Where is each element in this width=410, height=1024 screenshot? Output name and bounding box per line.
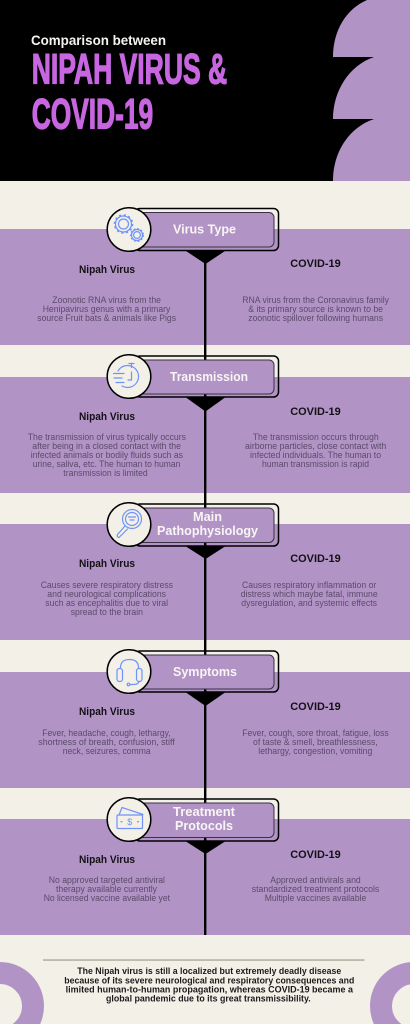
panel: symptoms: [38, 701, 389, 756]
conclusion text: limited human-to-human propagation, whereas COVID-19 became a: [66, 984, 353, 994]
text: Nipah pathophysiology: Causes severe respiratory distress: [41, 580, 174, 590]
text: COVID-19 symptoms: Fever, cough, sore throat, fatigue, loss: [242, 728, 389, 738]
decorative ring: bottom right: [381, 973, 410, 1024]
heading: COVID-19: COVID-19: [290, 849, 341, 861]
section header: Main Pathophysiology: Pathophysiology: [157, 524, 258, 538]
text: COVID-19 virus type: & its primary source is known to be: [248, 304, 383, 314]
header banner: [0, 0, 410, 181]
text: COVID-19 transmission: infected individuals. The human to: [250, 450, 381, 460]
section header: Transmission: Transmission: [170, 370, 248, 384]
text: Nipah virus type: [37, 295, 177, 323]
text: COVID-19 virus type: RNA virus from the Coronavirus family: [242, 295, 390, 305]
section header: Transmission: [107, 355, 278, 412]
section header: Virus Type: Virus Type: [173, 222, 236, 236]
heading: Nipah Virus: Nipah Virus: [79, 558, 135, 570]
text: COVID-19 treatment: Approved antivirals and: [270, 875, 361, 885]
decorative ring: bottom left: [0, 973, 33, 1024]
icon: stopwatch: [114, 364, 139, 387]
text: Nipah pathophysiology: [41, 580, 174, 617]
section header: Virus Type: [107, 208, 278, 264]
text: Nipah virus type: Zoonotic RNA virus from the: [52, 295, 161, 305]
icon: banknotes: $: [127, 817, 132, 827]
heading: Nipah Virus: Nipah Virus: [79, 411, 135, 423]
text: Nipah virus type: source Fruit bats & animals like Pigs: [37, 313, 177, 323]
section header: Treatment Protocols: [107, 798, 278, 854]
text: COVID-19 treatment: Multiple vaccines available: [265, 893, 366, 903]
text: COVID-19 symptoms: of taste & smell, breathlessness,: [253, 737, 378, 747]
text: Nipah symptoms: Fever, headache, cough, lethargy,: [42, 728, 171, 738]
text: Nipah symptoms: [38, 728, 175, 756]
panel: virus type: [37, 258, 390, 323]
section header: Main Pathophysiology: Main: [193, 510, 222, 524]
heading: Nipah Virus: Nipah Virus: [79, 264, 135, 276]
text: COVID-19 virus type: [242, 295, 390, 323]
panel: transmission: [28, 406, 386, 478]
text: COVID-19 transmission: airborne particles, close contact with: [245, 441, 386, 451]
text: Nipah treatment: therapy available currently: [56, 884, 158, 894]
text: Nipah transmission: [28, 432, 187, 478]
text: Nipah pathophysiology: spread to the brain: [71, 607, 143, 617]
text: Nipah treatment: No approved targeted antiviral: [49, 875, 165, 885]
text: COVID-19 symptoms: [242, 728, 389, 756]
text: Nipah transmission: urine, saliva, etc. The human to human: [33, 459, 180, 469]
text: COVID-19 transmission: The transmission occurs through: [253, 432, 379, 442]
text: COVID-19 pathophysiology: Causes respiratory inflammation or: [242, 580, 376, 590]
panel: treatment protocols: [44, 849, 380, 903]
section header: Symptoms: Symptoms: [173, 665, 237, 679]
scalloped corner shape: [333, 0, 410, 181]
conclusion text: global pandemic due to its great transmissibility.: [106, 994, 311, 1004]
section header: Symptoms: [107, 650, 278, 706]
heading: COVID-19: COVID-19: [290, 406, 341, 418]
text: COVID-19 pathophysiology: distress which maybe fatal, immune: [241, 589, 378, 599]
text: Nipah transmission: infected animals or bodily fluids such as: [31, 450, 184, 460]
text: Nipah pathophysiology: such as encephalitis due to viral: [45, 598, 168, 608]
icon: magnifying glass: [117, 510, 142, 538]
text: Nipah treatment: No licensed vaccine available yet: [44, 893, 171, 903]
text: COVID-19 pathophysiology: dysregulation, and systemic effects: [241, 598, 378, 608]
central timeline: [204, 250, 206, 935]
purple section bands: [0, 229, 410, 935]
icon: headset: [117, 660, 142, 686]
heading: COVID-19: COVID-19: [290, 553, 341, 565]
icon: gears: [114, 215, 143, 241]
title: COVID-19: [32, 91, 153, 138]
title: [31, 32, 227, 138]
text: COVID-19 pathophysiology: [241, 580, 378, 608]
panel: main pathophysiology: [41, 553, 378, 617]
text: Nipah symptoms: shortness of breath, confusion, stiff: [38, 737, 175, 747]
text: Nipah virus type: Henipavirus genus with a primary: [43, 304, 171, 314]
heading: COVID-19: COVID-19: [290, 258, 341, 270]
heading: COVID-19: COVID-19: [290, 701, 341, 713]
text: COVID-19 treatment: [252, 875, 380, 903]
text: Nipah pathophysiology: and neurological complications: [47, 589, 167, 599]
text: COVID-19 transmission: human transmission is rapid: [262, 459, 369, 469]
title: NIPAH VIRUS &: [32, 46, 227, 93]
text: Nipah transmission: The transmission of virus typically occurs: [28, 432, 187, 442]
text: Nipah symptoms: neck, seizures, comma: [63, 746, 151, 756]
text: Nipah transmission: after being in a closed contact with the: [32, 441, 181, 451]
text: Nipah transmission: transmission is limited: [63, 468, 148, 478]
text: COVID-19 transmission: [245, 432, 386, 469]
heading: Nipah Virus: Nipah Virus: [79, 706, 135, 718]
section header: Treatment Protocols: Protocols: [175, 819, 233, 833]
heading: Nipah Virus: Nipah Virus: [79, 854, 135, 866]
icon: banknotes: [117, 808, 143, 828]
conclusion text: The Nipah virus is still a localized but extremely deadly disease: [77, 966, 341, 976]
text: Nipah treatment: [44, 875, 171, 903]
title: Comparison between: [31, 32, 166, 48]
text: COVID-19 virus type: zoonotic spillover following humans: [248, 313, 384, 323]
conclusion text: [64, 966, 354, 1004]
conclusion text: because of its severe neurological and respiratory consequences and: [64, 975, 354, 985]
section header: Treatment Protocols: Treatment: [173, 805, 236, 819]
text: COVID-19 treatment: standardized treatment protocols: [252, 884, 380, 894]
text: COVID-19 symptoms: lethargy, congestion, vomiting: [258, 746, 372, 756]
section header: Main Pathophysiology: [107, 503, 278, 559]
